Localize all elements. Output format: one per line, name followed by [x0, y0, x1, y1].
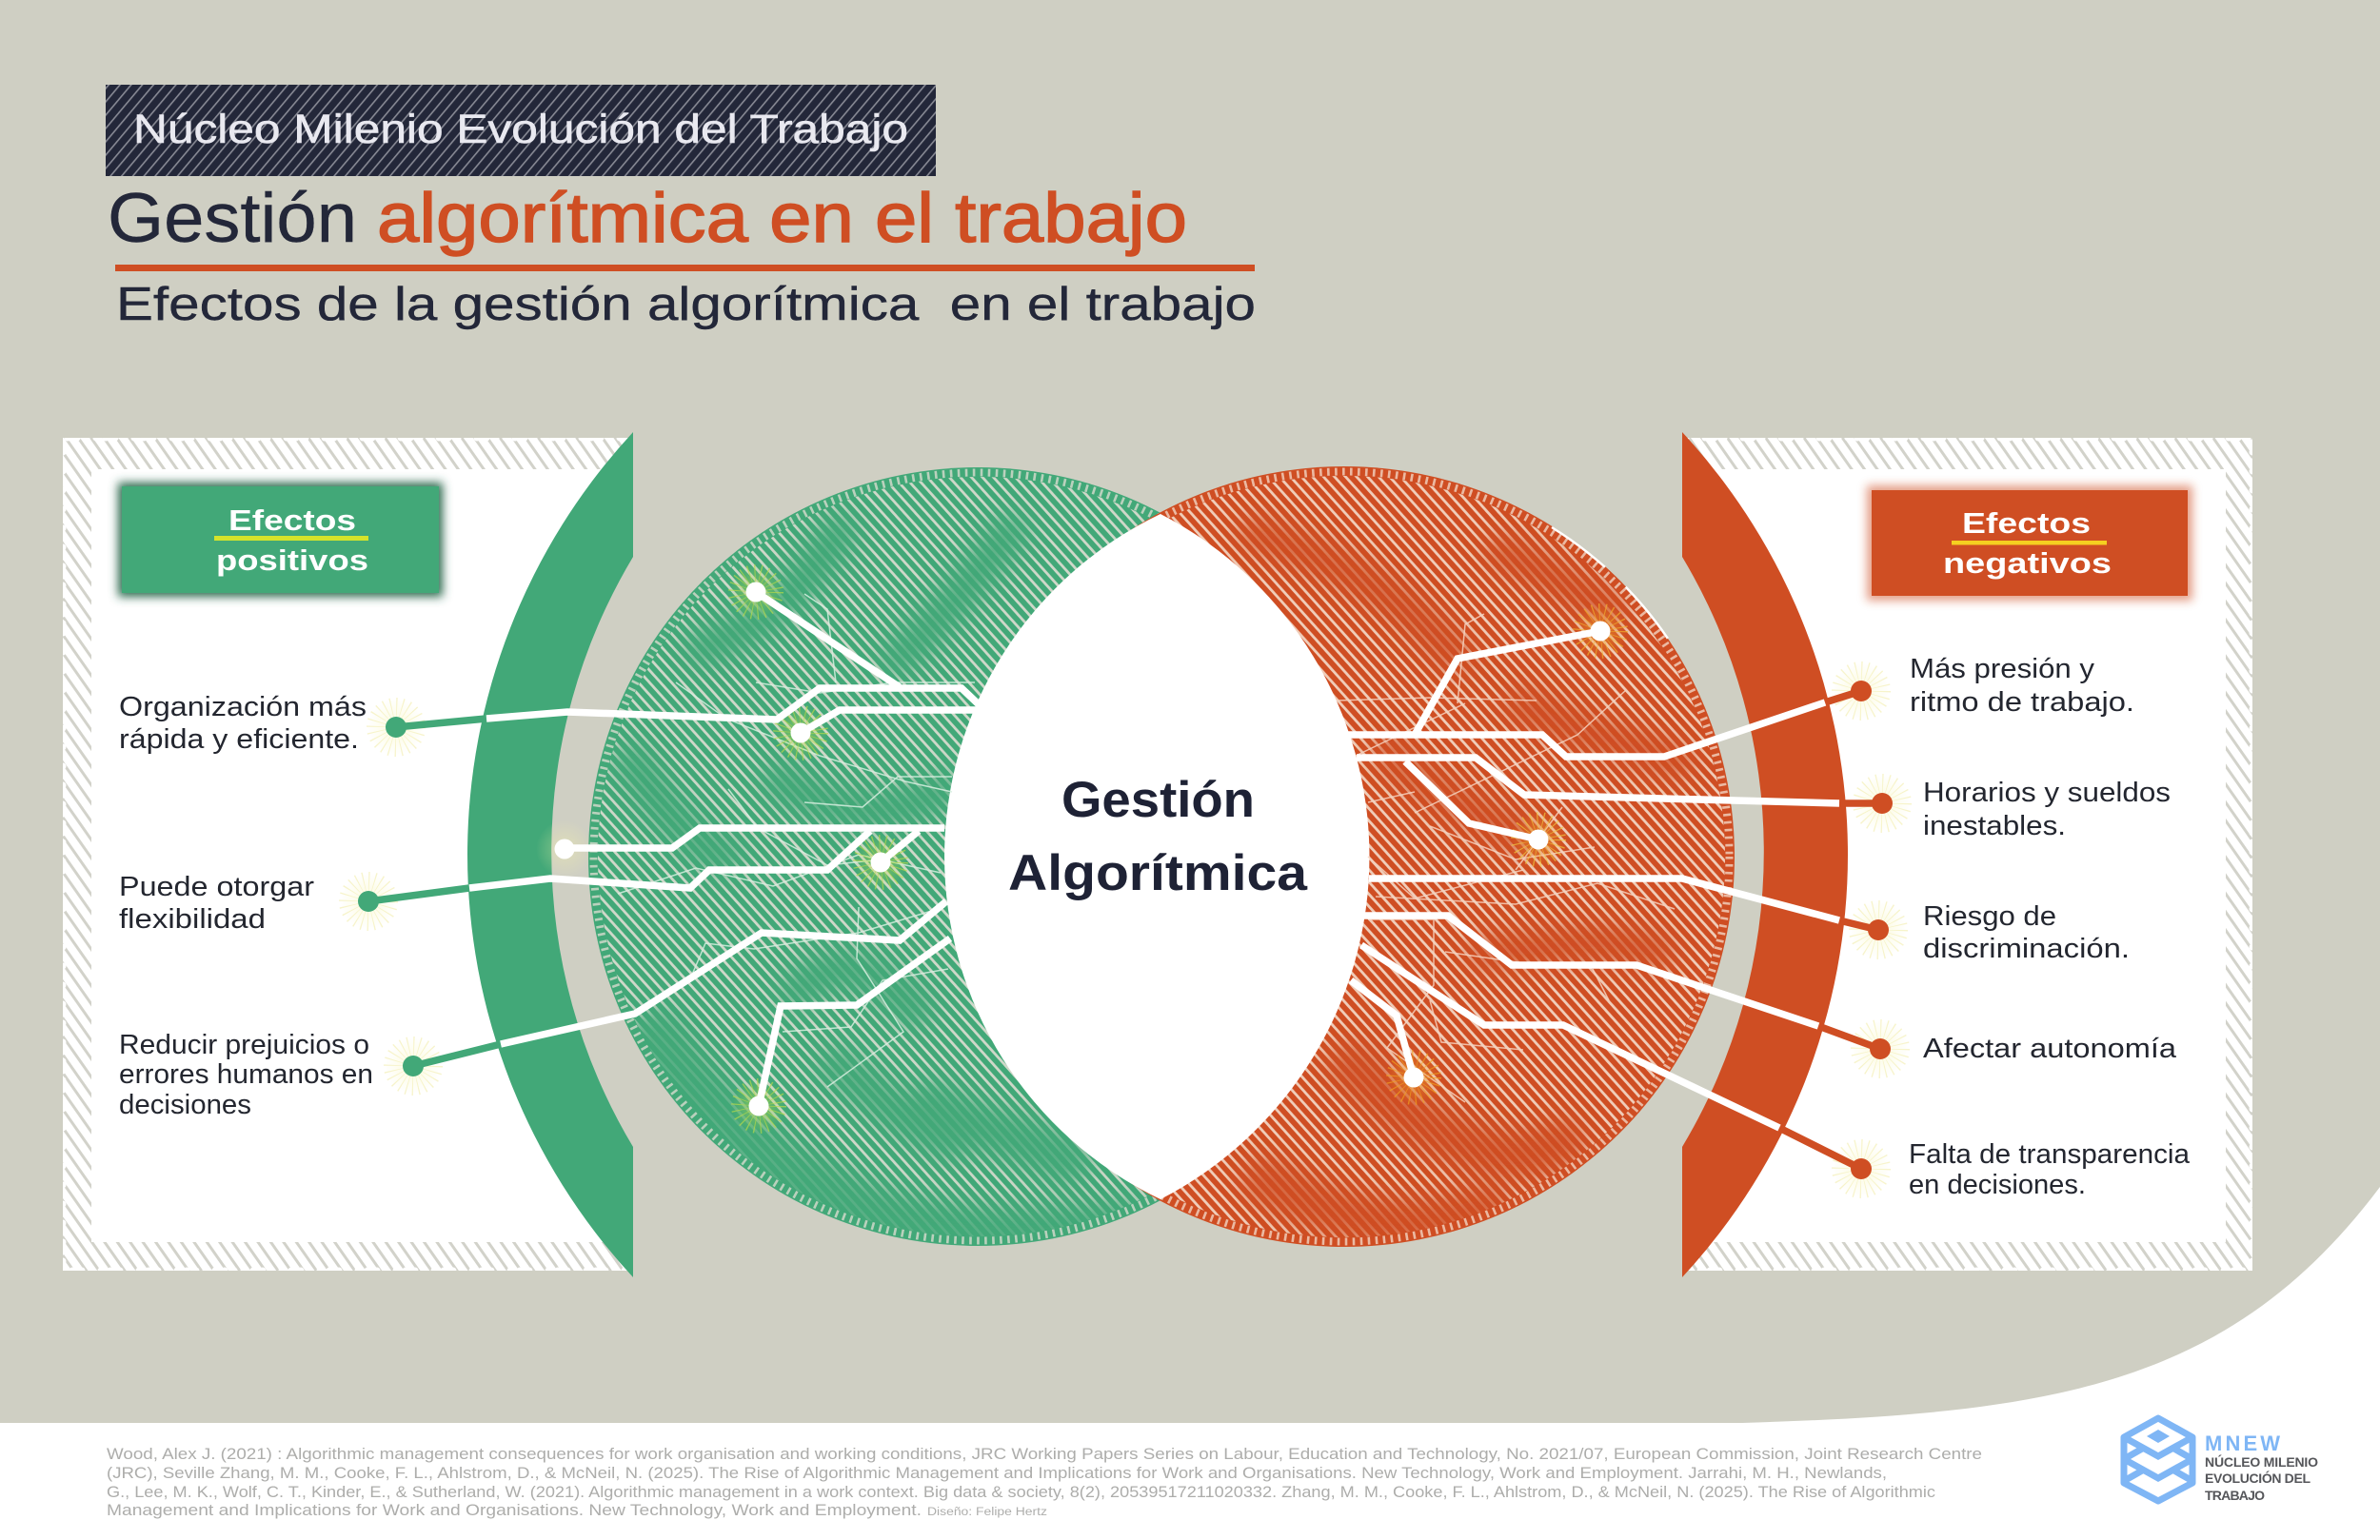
connector lines: positive effects [368, 592, 981, 1106]
positive effect label 1 [119, 692, 367, 755]
positive effect label 1: rápida y eficiente. [119, 724, 359, 755]
glow bursts: green side [340, 565, 907, 1133]
positive effect label 2: flexibilidad [119, 904, 266, 935]
panel: positive effects background [63, 438, 644, 1271]
center label [1008, 772, 1308, 901]
red crescent [1682, 432, 1848, 1277]
negative effect label 2: Horarios y sueldos [1923, 778, 2171, 808]
negative effect label 5 [1909, 1139, 2191, 1200]
node dots [358, 582, 1893, 1179]
connector lines: negative effects [1348, 631, 1882, 1169]
negative effect label 1: ritmo de trabajo. [1910, 687, 2134, 718]
negative effect label 1 [1910, 654, 2134, 718]
thin circuit traces: green side [618, 594, 975, 1087]
logo: MNEW: MNEW [2205, 1431, 2280, 1455]
icon: layered hexagon [2124, 1418, 2192, 1501]
thin circuit traces: red side [1337, 614, 1675, 1102]
references: Diseño: Felipe Hertz [927, 1507, 1047, 1518]
positive effect label 3: Reducir prejuicios o [119, 1030, 369, 1060]
references [107, 1446, 1982, 1519]
negative effect label 3 [1923, 901, 2130, 964]
positive effect label 2: Puede otorgar [119, 872, 314, 902]
central white lens [944, 514, 1369, 1199]
negative effect label 4: Afectar autonomía [1923, 1034, 2177, 1064]
logo: MNEW: TRABAJO [2205, 1488, 2265, 1503]
positive effect label 3: errores humanos en [119, 1059, 373, 1090]
references: (JRC), Seville Zhang, M. M., Cooke, F. L., Ahlstrom, D., & McNeil, N. (2025). The Rise of Algorithmic Management and Implications for Work and Organisations. New Technology, Work and Employment. Jarrahi, M. H., Newlands, [107, 1465, 1887, 1482]
negative effect label 2: inestables. [1923, 811, 2066, 841]
green crescent [467, 432, 633, 1277]
negative effect label 3: Riesgo de [1923, 901, 2056, 932]
references: G., Lee, M. K., Wolf, C. T., Kinder, E., & Sutherland, W. (2021). Algorithmic management in a work context. Big data & society, 8(2), 20539517211020332. Zhang, M. M., Cooke, F. L., Ahlstrom, D., & McNeil, N. (2025). The Rise of Algorithmic [107, 1484, 1935, 1501]
negative effect label 5: Falta de transparencia [1909, 1139, 2191, 1170]
positive effect label 3: decisiones [119, 1090, 251, 1120]
logo: MNEW [2124, 1418, 2318, 1503]
logo: MNEW: EVOLUCIÓN DEL [2205, 1470, 2311, 1486]
title: Gestión [108, 180, 357, 257]
green hatched circle [588, 467, 1160, 1246]
positive effect label 1: Organización más [119, 692, 367, 722]
center label: Algorítmica [1008, 845, 1308, 901]
subtitle: Efectos de la gestión algorítmica en el trabajo [116, 279, 1256, 330]
negative effect label 2 [1923, 778, 2171, 841]
panel: negative effects background [1672, 438, 2252, 1271]
badge: efectos positivos: positivos [216, 543, 368, 577]
logo: MNEW: NÚCLEO MILENIO [2205, 1453, 2318, 1470]
badge: efectos negativos: Efectos [1962, 506, 2091, 540]
badge: efectos negativos [1867, 485, 2192, 601]
negative effect label 3: discriminación. [1923, 934, 2130, 964]
red hatched circle [1129, 466, 1735, 1247]
header: organization banner [106, 85, 936, 176]
positive effect label 3 [119, 1030, 373, 1120]
footer white band with curve [0, 1187, 2380, 1540]
references: Management and Implications for Work and Organisations. New Technology, Work and Employment. [107, 1502, 922, 1519]
header: organization banner: Núcleo Milenio Evolución del Trabajo [133, 107, 908, 152]
negative effect label 1: Más presión y [1910, 654, 2095, 684]
title: algorítmica en el trabajo [377, 180, 1187, 257]
title [108, 180, 1187, 257]
badge: efectos positivos: Efectos [228, 503, 356, 537]
title underline [115, 265, 1255, 271]
references: Wood, Alex J. (2021) : Algorithmic management consequences for work organisation and working conditions, JRC Working Papers Series on Labour, Education and Technology, No. 2021/07, European Commission, Joint Research Centre [107, 1446, 1982, 1463]
negative effect label 5: en decisiones. [1909, 1170, 2086, 1200]
positive effect label 2 [119, 872, 314, 935]
badge: efectos positivos [118, 483, 443, 597]
badge: efectos negativos: negativos [1943, 546, 2112, 580]
glow bursts: red side [1387, 604, 1911, 1197]
center label: Gestión [1061, 772, 1255, 828]
